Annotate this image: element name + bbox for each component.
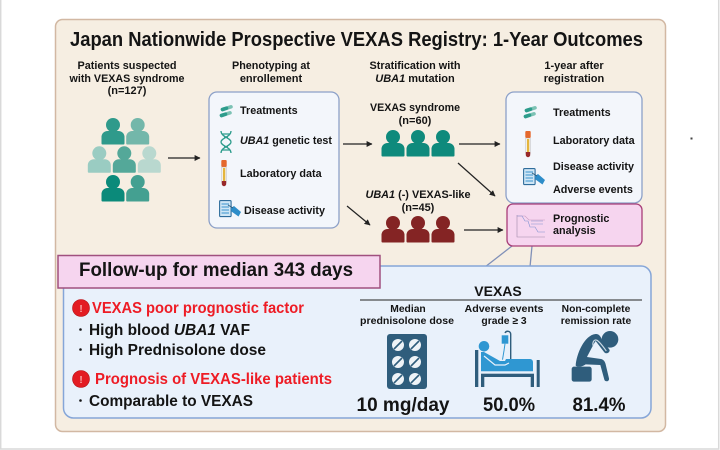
arrow: VEXAS syndrome to prognostic analysis — [458, 163, 495, 196]
list item: UBA1 VAF: High blood UBA1 VAF — [89, 322, 250, 339]
heading: stratification — [370, 60, 461, 85]
title: Japan Nationwide Prospective VEXAS Registry: 1-Year Outcomes — [70, 29, 643, 51]
heading: VEXAS outcomes: VEXAS — [474, 283, 522, 299]
metric: adverse events — [464, 304, 544, 416]
icon: test tube — [221, 160, 227, 186]
heading: phenotyping: enrollement — [240, 73, 303, 85]
panel: 1-year after registration — [506, 92, 642, 203]
metric: median prednisolone dose — [356, 304, 454, 416]
UBA1 genetic test label: UBA1 genetic test — [240, 135, 332, 147]
panel: prognostic analysis: analysis — [553, 225, 596, 237]
arrow: VEXAS-like to prognostic analysis — [464, 229, 503, 231]
VEXAS-like group: UBA1 (-) VEXAS-like — [366, 189, 470, 201]
heading: 1-year after registration — [544, 60, 605, 85]
metric: median prednisolone dose: prednisolone dose — [360, 316, 454, 327]
value: 50.0%: 50.0% — [483, 395, 535, 416]
prognostic analysis label: Prognostic — [553, 213, 609, 225]
value: 81.4%: 81.4% — [572, 395, 626, 416]
stray dot — [690, 138, 692, 140]
prognosis of VEXAS-like patients — [72, 370, 332, 410]
laboratory data label: Laboratory data — [553, 135, 636, 147]
icon: treatments — [222, 107, 231, 116]
poor prognostic factors — [72, 300, 304, 359]
value: 10 mg/day: 10 mg/day — [356, 395, 450, 416]
icon: clipboard — [524, 169, 545, 185]
treatments label: Treatments — [240, 105, 298, 117]
list item: comparable: Comparable to VEXAS — [89, 393, 253, 410]
arrow: patients to phenotyping — [168, 157, 200, 159]
main panel — [56, 20, 666, 432]
heading: phenotyping — [232, 60, 310, 85]
survival curve chart — [517, 215, 545, 237]
icon: clipboard — [220, 201, 241, 217]
icon: DNA — [221, 131, 231, 153]
heading: poor prognostic factor: VEXAS poor prognostic factor — [92, 300, 304, 317]
banner: follow-up: Follow-up for median 343 days — [79, 260, 353, 281]
laboratory data label: Laboratory data — [240, 168, 323, 180]
metric: adverse events: grade ≥ 3 — [481, 316, 527, 327]
panel: phenotyping at enrollment — [209, 92, 339, 228]
VEXAS syndrome group: (n=60) — [399, 115, 432, 127]
icon: alert — [72, 370, 90, 388]
icon: alert: ! — [79, 304, 83, 315]
adverse events label: Adverse events — [553, 184, 633, 196]
treatments label: Treatments — [553, 107, 611, 119]
icon: alert: ! — [79, 375, 83, 386]
metric: non-complete remission: remission rate — [561, 316, 631, 327]
arrow: phenotyping to VEXAS-like — [347, 206, 370, 225]
arrow: VEXAS syndrome to 1-year — [459, 143, 500, 145]
heading: patients suspected — [69, 60, 184, 97]
heading: patients suspected: Patients suspected — [78, 60, 176, 72]
metric: adverse events: Adverse events — [464, 304, 544, 315]
VEXAS-like group: (n=45) — [402, 202, 435, 214]
icon: pill pack — [387, 334, 427, 389]
arrow: phenotyping to VEXAS syndrome — [343, 143, 372, 145]
connector lines to outcome panel — [485, 246, 532, 267]
metric: non-complete remission: Non-complete — [562, 304, 631, 315]
heading: phenotyping: Phenotyping at — [232, 60, 310, 72]
panel: outcomes — [64, 266, 651, 418]
panel: prognostic analysis — [507, 204, 642, 246]
list item: prednisolone dose: High Prednisolone dose — [89, 342, 266, 359]
disease activity label: Disease activity — [553, 161, 634, 173]
heading: stratification: UBA1 mutation — [375, 73, 455, 85]
heading: 1-year after registration: 1-year after — [544, 60, 604, 72]
metric: non-complete remission — [561, 304, 631, 416]
heading: patients suspected: with VEXAS syndrome — [69, 73, 184, 85]
icon: treatments — [526, 108, 535, 116]
disease activity label: Disease activity — [244, 205, 325, 217]
heading: patients suspected: (n=127) — [108, 85, 147, 97]
icon: hospital bed — [475, 331, 540, 387]
heading: VEXAS-like prognosis: Prognosis of VEXAS-like patients — [95, 371, 332, 388]
icon group: 127 suspected patients — [88, 118, 161, 202]
banner: follow-up — [58, 256, 380, 288]
icon: test tube — [525, 131, 531, 157]
metric: median prednisolone dose: Median — [390, 304, 426, 315]
VEXAS syndrome group — [370, 102, 460, 156]
heading: stratification: Stratification with — [370, 60, 461, 72]
heading: 1-year after registration: registration — [544, 73, 605, 85]
icon: despairing person — [572, 331, 618, 382]
icon: alert — [72, 300, 90, 316]
VEXAS-like group — [366, 189, 470, 242]
VEXAS syndrome group: VEXAS syndrome — [370, 102, 460, 114]
